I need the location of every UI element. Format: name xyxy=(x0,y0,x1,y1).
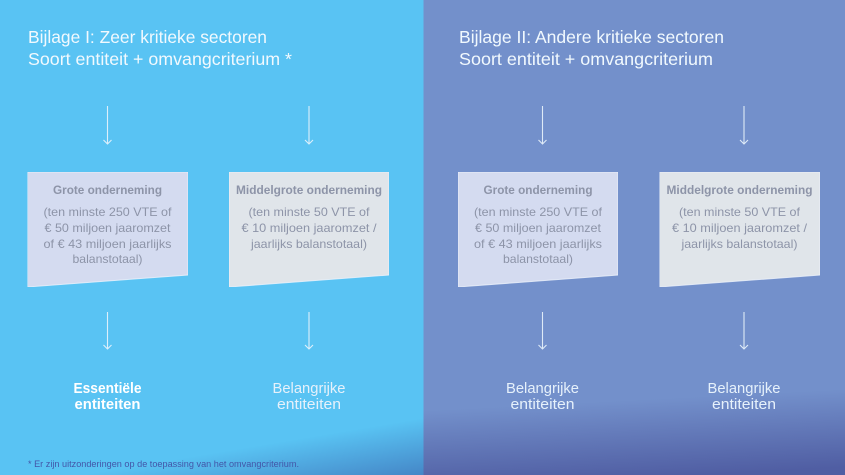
box: Grote onderneming: (ten minste 250 VTE of xyxy=(474,205,603,219)
heading: Bijlage I: Soort entiteit + omvangcriterium * xyxy=(28,49,292,69)
label: Belangrijke entiteiten: entiteiten xyxy=(712,396,776,413)
box: Middelgrote onderneming: jaarlijks balanstotaal) xyxy=(250,237,367,251)
box: Grote onderneming: balanstotaal) xyxy=(72,252,142,266)
box: Middelgrote onderneming: € 10 miljoen jaaromzet / xyxy=(672,221,808,235)
label: Belangrijke entiteiten xyxy=(708,380,780,413)
arrow: to important entities xyxy=(740,312,748,349)
box: Grote onderneming: € 50 miljoen jaaromzet xyxy=(44,221,171,235)
heading: Bijlage II: Soort entiteit + omvangcriterium xyxy=(459,49,713,69)
heading: Bijlage II: Bijlage II: Andere kritieke sectoren xyxy=(459,27,724,47)
label: Essentiële entiteiten xyxy=(74,380,142,413)
label: Belangrijke entiteiten: entiteiten xyxy=(277,396,341,413)
label: Belangrijke entiteiten: Belangrijke xyxy=(708,380,780,397)
heading: Bijlage II xyxy=(459,27,724,69)
box: Middelgrote onderneming: Middelgrote onderneming xyxy=(666,183,812,197)
arrow: to essential entities xyxy=(104,312,112,349)
box: Grote onderneming xyxy=(458,172,618,287)
arrow: to important entities xyxy=(538,312,546,349)
box: Middelgrote onderneming xyxy=(660,172,820,287)
label: Essentiële entiteiten: Essentiële xyxy=(74,380,142,397)
box: Middelgrote onderneming xyxy=(229,172,389,287)
box: Middelgrote onderneming: (ten minste 50 VTE of xyxy=(679,205,801,219)
box: Grote onderneming: € 50 miljoen jaaromzet xyxy=(475,221,602,235)
label: Belangrijke entiteiten: Belangrijke xyxy=(272,380,346,397)
label: Belangrijke entiteiten xyxy=(272,380,346,413)
heading: Bijlage I xyxy=(28,27,292,69)
box: Middelgrote onderneming: Middelgrote onderneming xyxy=(236,183,382,197)
label: Belangrijke entiteiten: entiteiten xyxy=(510,396,574,413)
label: Belangrijke entiteiten: Belangrijke xyxy=(506,380,579,397)
footnote: * Er zijn uitzonderingen op de toepassing van het omvangcriterium. xyxy=(28,459,299,469)
heading: Bijlage I: Bijlage I: Zeer kritieke sectoren xyxy=(28,27,267,47)
box: Grote onderneming: of € 43 miljoen jaarlijks xyxy=(44,237,172,251)
box: Grote onderneming: (ten minste 250 VTE of xyxy=(44,205,172,219)
arrow: to large enterprise xyxy=(104,106,112,144)
arrow: to large enterprise xyxy=(538,106,546,144)
box: Grote onderneming: of € 43 miljoen jaarlijks xyxy=(474,237,602,251)
box: Middelgrote onderneming: jaarlijks balanstotaal) xyxy=(680,237,798,251)
panel: Bijlage I xyxy=(0,0,424,475)
box: Middelgrote onderneming: (ten minste 50 VTE of xyxy=(248,205,370,219)
box: Middelgrote onderneming: € 10 miljoen jaaromzet / xyxy=(242,221,377,235)
box: Grote onderneming xyxy=(28,172,188,287)
label: Belangrijke entiteiten xyxy=(506,380,579,413)
arrow: to medium enterprise xyxy=(305,106,313,144)
box: Grote onderneming: Grote onderneming xyxy=(484,183,592,197)
box: Grote onderneming: Grote onderneming xyxy=(53,183,162,197)
box: Grote onderneming: balanstotaal) xyxy=(503,252,573,266)
arrow: to medium enterprise xyxy=(740,106,748,144)
panel: Bijlage II xyxy=(424,0,845,475)
label: Essentiële entiteiten: entiteiten xyxy=(74,396,140,413)
arrow: to important entities xyxy=(305,312,313,349)
